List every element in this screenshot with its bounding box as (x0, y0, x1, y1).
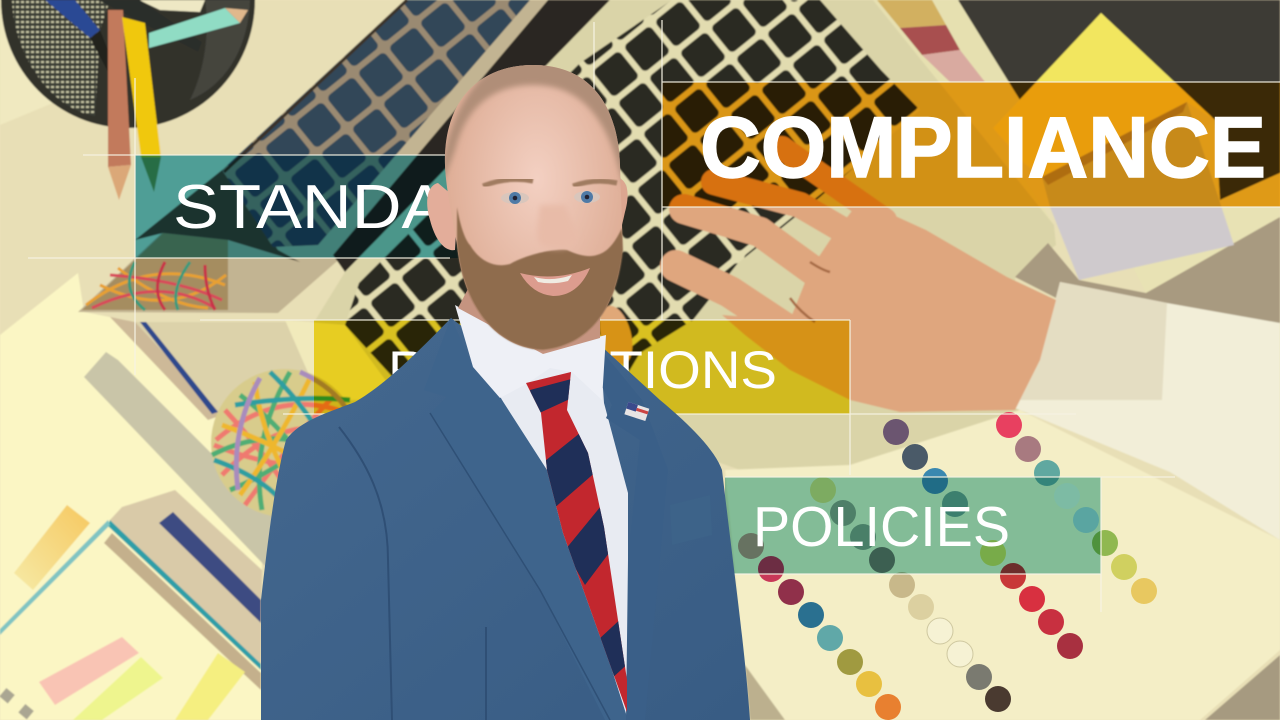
notebook edge (0, 520, 261, 690)
rubber band ball (211, 369, 359, 517)
wood top right (873, 0, 1054, 225)
collar (455, 305, 606, 400)
ruler (84, 352, 278, 568)
hand (676, 148, 1056, 412)
right lapel (594, 345, 668, 720)
yellow sticky (993, 13, 1215, 177)
right laptop body (300, 0, 1056, 470)
heading: standards: STANDARDS (173, 173, 593, 242)
heading: policies: POLICIES (753, 495, 1010, 559)
panel: policies band (725, 477, 1101, 574)
right eye (574, 191, 600, 203)
finger behind collar (594, 302, 638, 368)
pencil holder (1, 0, 255, 200)
panel: chart colour dots (738, 412, 1157, 720)
person: presenter in blue suit (261, 55, 750, 720)
right ear (618, 178, 628, 238)
mouth (520, 268, 590, 296)
left ear (427, 183, 458, 250)
wooden strip (110, 317, 222, 420)
teeth (534, 275, 572, 283)
suit jacket (261, 318, 750, 720)
wood right (1015, 217, 1280, 330)
lavender sticky pad (1042, 102, 1234, 280)
panel: compliance band (662, 82, 1280, 207)
heading: regulations: REGULATIONS (388, 341, 777, 400)
necktie (526, 372, 627, 712)
palm rest curve (285, 320, 400, 400)
rubber band ball reflection (86, 262, 226, 310)
sticky notes (0, 505, 245, 720)
neck (458, 285, 600, 354)
left eye (501, 192, 529, 204)
beard (457, 207, 623, 350)
arm seam (339, 427, 486, 720)
dark tablet (958, 0, 1280, 200)
panel: standards band (135, 155, 460, 258)
right keyboard (345, 0, 920, 420)
cream device right (1100, 120, 1280, 293)
head (445, 65, 622, 350)
notebook paper, lower left (0, 273, 262, 720)
left lapel (424, 318, 628, 720)
lapel edge (430, 413, 610, 720)
heading: compliance: COMPLIANCE (700, 100, 1266, 196)
left laptop body (78, 0, 640, 313)
left keyboard (222, 0, 530, 247)
wood bottom right (1205, 655, 1280, 720)
flag pin (624, 402, 649, 421)
hair stubble (444, 65, 620, 182)
eyebrows (483, 179, 617, 186)
panel: regulations band (314, 320, 850, 414)
chart paper (725, 410, 1280, 720)
laptop hinge (333, 0, 610, 272)
laptop left edge (224, 0, 407, 172)
shadow behind pen (110, 490, 262, 667)
shirt sleeve (1015, 282, 1280, 540)
nose (537, 205, 578, 249)
pocket welt (670, 495, 712, 545)
colour swatch (877, 0, 985, 82)
dark pen (159, 512, 261, 623)
shirt (473, 345, 628, 720)
